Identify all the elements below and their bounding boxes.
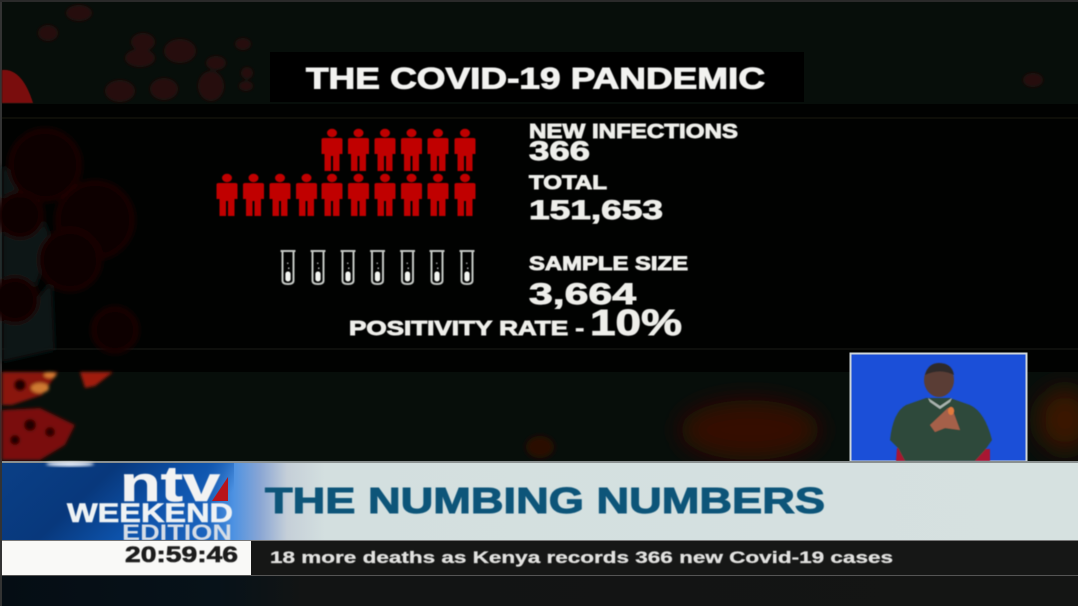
virus illustration left — [0, 130, 137, 460]
icon row: new infections people — [322, 129, 476, 171]
title plate — [270, 52, 804, 102]
headline banner — [2, 461, 1078, 540]
stat: total: 151,653 — [529, 195, 663, 225]
ticker text: 18 more deaths as Kenya records 366 new Covid-19 cases — [270, 548, 893, 567]
stat: sample size: 3,664 — [529, 278, 636, 311]
stat: positivity rate: 10% — [590, 302, 682, 343]
stat: positivity rate — [349, 302, 682, 343]
sign language interpreter inset — [850, 354, 1026, 462]
icon row: total people — [216, 174, 476, 216]
stat: positivity rate: POSITIVITY RATE - — [349, 318, 584, 340]
stat: new infections — [529, 121, 738, 166]
edition: EDITION — [122, 520, 232, 545]
ticker bar — [2, 540, 1078, 576]
stat: new infections: NEW INFECTIONS — [529, 121, 738, 143]
stat: sample size — [529, 254, 688, 311]
stat: sample size: SAMPLE SIZE — [529, 254, 688, 275]
icon row: test tubes — [280, 251, 474, 284]
clock — [2, 541, 251, 575]
headline text: THE NUMBING NUMBERS — [265, 480, 825, 521]
ntv logo block — [2, 456, 234, 545]
title: THE COVID-19 PANDEMIC — [306, 62, 765, 96]
stat: total — [529, 173, 663, 225]
weekend: WEEKEND — [67, 498, 233, 528]
black data band — [2, 104, 1078, 372]
stat: new infections: 366 — [529, 136, 590, 166]
stat: total: TOTAL — [529, 173, 607, 194]
time: 20:59:46 — [125, 542, 238, 567]
ntv wordmark: ntv — [120, 456, 220, 512]
